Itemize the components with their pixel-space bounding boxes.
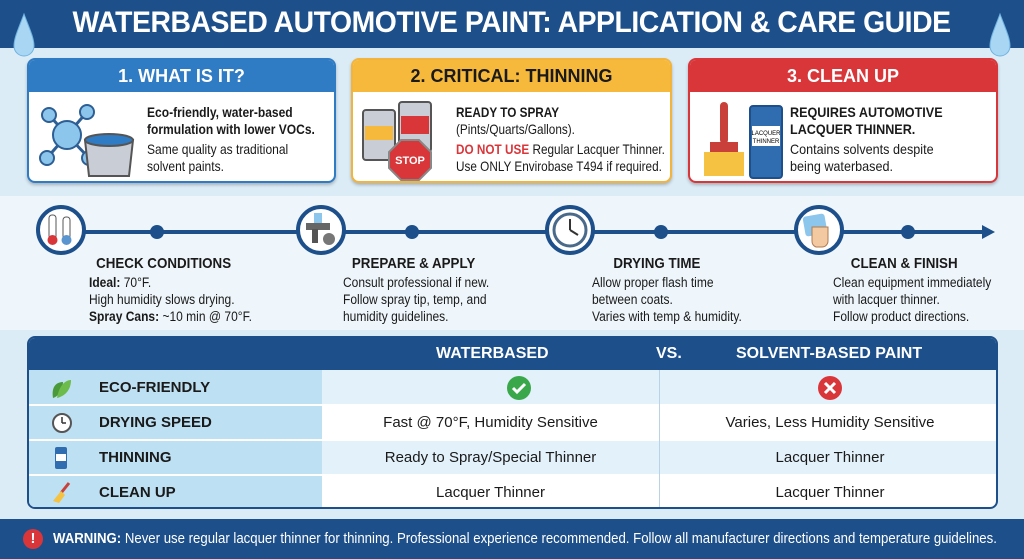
step: prepare and apply (343, 255, 489, 324)
text: thinning: (Pints/Quarts/Gallons). (456, 121, 575, 137)
table header: VS. (656, 345, 682, 362)
icon: clock (545, 205, 595, 255)
step: drying time: Allow proper flash time (592, 275, 714, 290)
text: thinning (456, 104, 665, 174)
text: what is it: solvent paints. (147, 158, 224, 174)
step: check conditions (89, 255, 252, 324)
header: title (0, 0, 1024, 48)
text: clean up: being waterbased. (790, 158, 893, 174)
row: thinning: THINNING (99, 449, 172, 466)
icon: water drops decoration (14, 12, 34, 56)
heading: thinning: 2. CRITICAL: THINNING (410, 66, 612, 86)
row: drying speed: Varies, Less Humidity Sensitive (726, 414, 934, 431)
text: clean up (790, 104, 943, 174)
icon: warning: ! (30, 530, 36, 547)
header: title: WATERBASED AUTOMOTIVE PAINT: APPLICATION & CARE GUIDE (73, 6, 951, 39)
step: check conditions: CHECK CONDITIONS (96, 255, 231, 272)
icon: cans and stop sign (362, 101, 432, 181)
step: clean and finish: with lacquer thinner. (833, 292, 940, 307)
text: thinning: DO NOT USE Regular Lacquer Thinner. (456, 141, 665, 157)
icon: brush and thinner can: THINNER (753, 139, 780, 145)
row: drying speed: DRYING SPEED (99, 414, 212, 431)
text: warning: WARNING: Never use regular lacquer thinner for thinning. Professional experience recommended. Follow all manufacturer directions and temperature guidelines. (53, 531, 997, 547)
row: clean up: Lacquer Thinner (776, 484, 884, 501)
text: what is it: Same quality as traditional (147, 141, 288, 157)
row: thinning: Ready to Spray/Special Thinner (385, 449, 596, 466)
row: thinning (55, 447, 884, 469)
heading: what is it (29, 60, 334, 92)
table rows (29, 370, 996, 507)
text: what is it: Eco-friendly, water-based (147, 104, 293, 120)
row: clean up: Lacquer Thinner (436, 484, 545, 501)
step: prepare and apply: Consult professional if new. (343, 275, 489, 290)
row: eco-friendly (52, 376, 842, 400)
step: drying time (592, 255, 742, 324)
step: prepare and apply: humidity guidelines. (343, 309, 449, 324)
text: thinning: Use ONLY Envirobase T494 if required. (456, 158, 662, 174)
icon: cans and stop sign: STOP (395, 155, 425, 167)
text: thinning: READY TO SPRAY (456, 104, 559, 120)
icon: molecule and bucket (39, 104, 134, 177)
row: thinning: Lacquer Thinner (776, 449, 884, 466)
step: drying time: DRYING TIME (613, 255, 700, 272)
icon: warning (23, 529, 43, 549)
icon: thermometers (36, 205, 86, 255)
comparison table (27, 336, 998, 509)
table header (29, 338, 1000, 370)
text: clean up: REQUIRES AUTOMOTIVE (790, 104, 943, 120)
step: drying time: between coats. (592, 292, 673, 307)
step: clean and finish: Clean equipment immediately (833, 275, 991, 290)
row: eco-friendly: ECO-FRIENDLY (99, 379, 210, 396)
table header: WATERBASED (436, 345, 549, 362)
step: clean and finish (833, 255, 992, 324)
icon: spray gun (296, 205, 346, 255)
heading: clean up (690, 60, 996, 92)
panel: what is it (27, 58, 336, 183)
footer warning (0, 519, 1024, 559)
icon: hand wiping (794, 205, 844, 255)
row: clean up (53, 482, 884, 503)
text: clean up: Contains solvents despite (790, 141, 934, 157)
step: check conditions: Ideal: 70°F. (89, 275, 151, 290)
icon: brush and thinner can (704, 102, 783, 179)
table header: SOLVENT-BASED PAINT (736, 345, 922, 362)
heading: thinning (353, 60, 670, 92)
icon: brush and thinner can: LACQUER (751, 131, 781, 137)
panel: critical thinning (351, 58, 672, 183)
step: clean and finish: Follow product directions. (833, 309, 969, 324)
row: clean up: CLEAN UP (99, 484, 176, 501)
step: check conditions: Spray Cans: ~10 min @ 70°F. (89, 309, 252, 324)
step: drying time: Varies with temp & humidity. (592, 309, 742, 324)
step: prepare and apply: PREPARE & APPLY (352, 255, 475, 272)
text: what is it (147, 104, 315, 174)
step: check conditions: High humidity slows drying. (89, 292, 235, 307)
step: prepare and apply: Follow spray tip, temp, and (343, 292, 487, 307)
heading: what is it: 1. WHAT IS IT? (118, 66, 245, 86)
row: drying speed: Fast @ 70°F, Humidity Sensitive (383, 414, 598, 431)
step: clean and finish: CLEAN & FINISH (851, 255, 958, 272)
heading: clean up: 3. CLEAN UP (787, 66, 899, 86)
panel: clean up (688, 58, 998, 183)
text: what is it: formulation with lower VOCs. (147, 121, 315, 137)
timeline band (0, 196, 1024, 330)
arrow: timeline (86, 225, 995, 239)
text: clean up: LACQUER THINNER. (790, 121, 915, 137)
row: drying speed (52, 413, 934, 433)
